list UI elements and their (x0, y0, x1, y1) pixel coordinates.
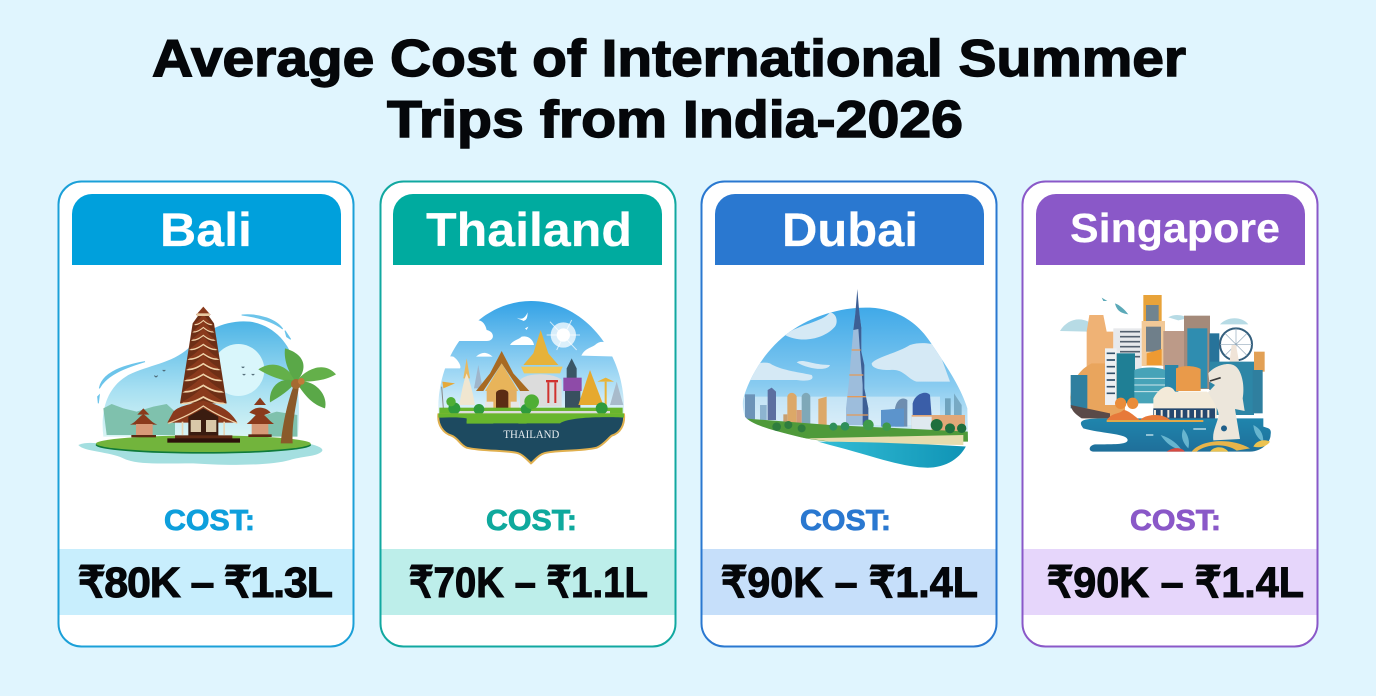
Dubai header (715, 194, 984, 265)
title: Average Cost of International Summer (152, 30, 1186, 88)
icon: Singapore skyline illustration (1060, 295, 1271, 452)
Dubai cost band: ₹90K – ₹1.4L (721, 559, 978, 607)
merlion statue (1208, 364, 1245, 440)
Singapore header (1036, 194, 1305, 265)
Dubai cost label: COST: (800, 505, 891, 537)
panel: Singapore (1022, 182, 1318, 646)
icon: Dubai skyline illustration (740, 289, 973, 472)
Singapore header: Singapore (1070, 205, 1280, 251)
Thailand caption: THAILAND (503, 429, 559, 441)
Dubai header: Dubai (782, 203, 918, 256)
Bali cost label: COST: (164, 505, 255, 537)
title: Trips from India-2026 (387, 91, 963, 149)
Thailand cost band: ₹70K – ₹1.1L (409, 559, 648, 607)
Dubai cost band (702, 549, 996, 615)
Thailand cost label: COST: (486, 505, 577, 537)
icon: Bali temple illustration (78, 307, 336, 465)
Singapore cost band (1024, 549, 1316, 615)
Bali cost band: ₹80K – ₹1.3L (78, 559, 333, 607)
Bali header (72, 194, 341, 265)
Singapore cost band: ₹90K – ₹1.4L (1047, 559, 1304, 607)
Thailand header (393, 194, 662, 265)
Singapore cost label: COST: (1130, 505, 1221, 537)
Thailand cost band (382, 549, 674, 615)
panel: Dubai (702, 182, 996, 646)
panel: Thailand (380, 182, 676, 646)
Thailand header: Thailand (426, 203, 632, 256)
Bali cost band (60, 549, 352, 615)
panel: Bali (58, 182, 354, 646)
title (152, 30, 1186, 149)
icon: Thailand temples illustration (438, 301, 624, 463)
Bali header: Bali (160, 203, 252, 256)
